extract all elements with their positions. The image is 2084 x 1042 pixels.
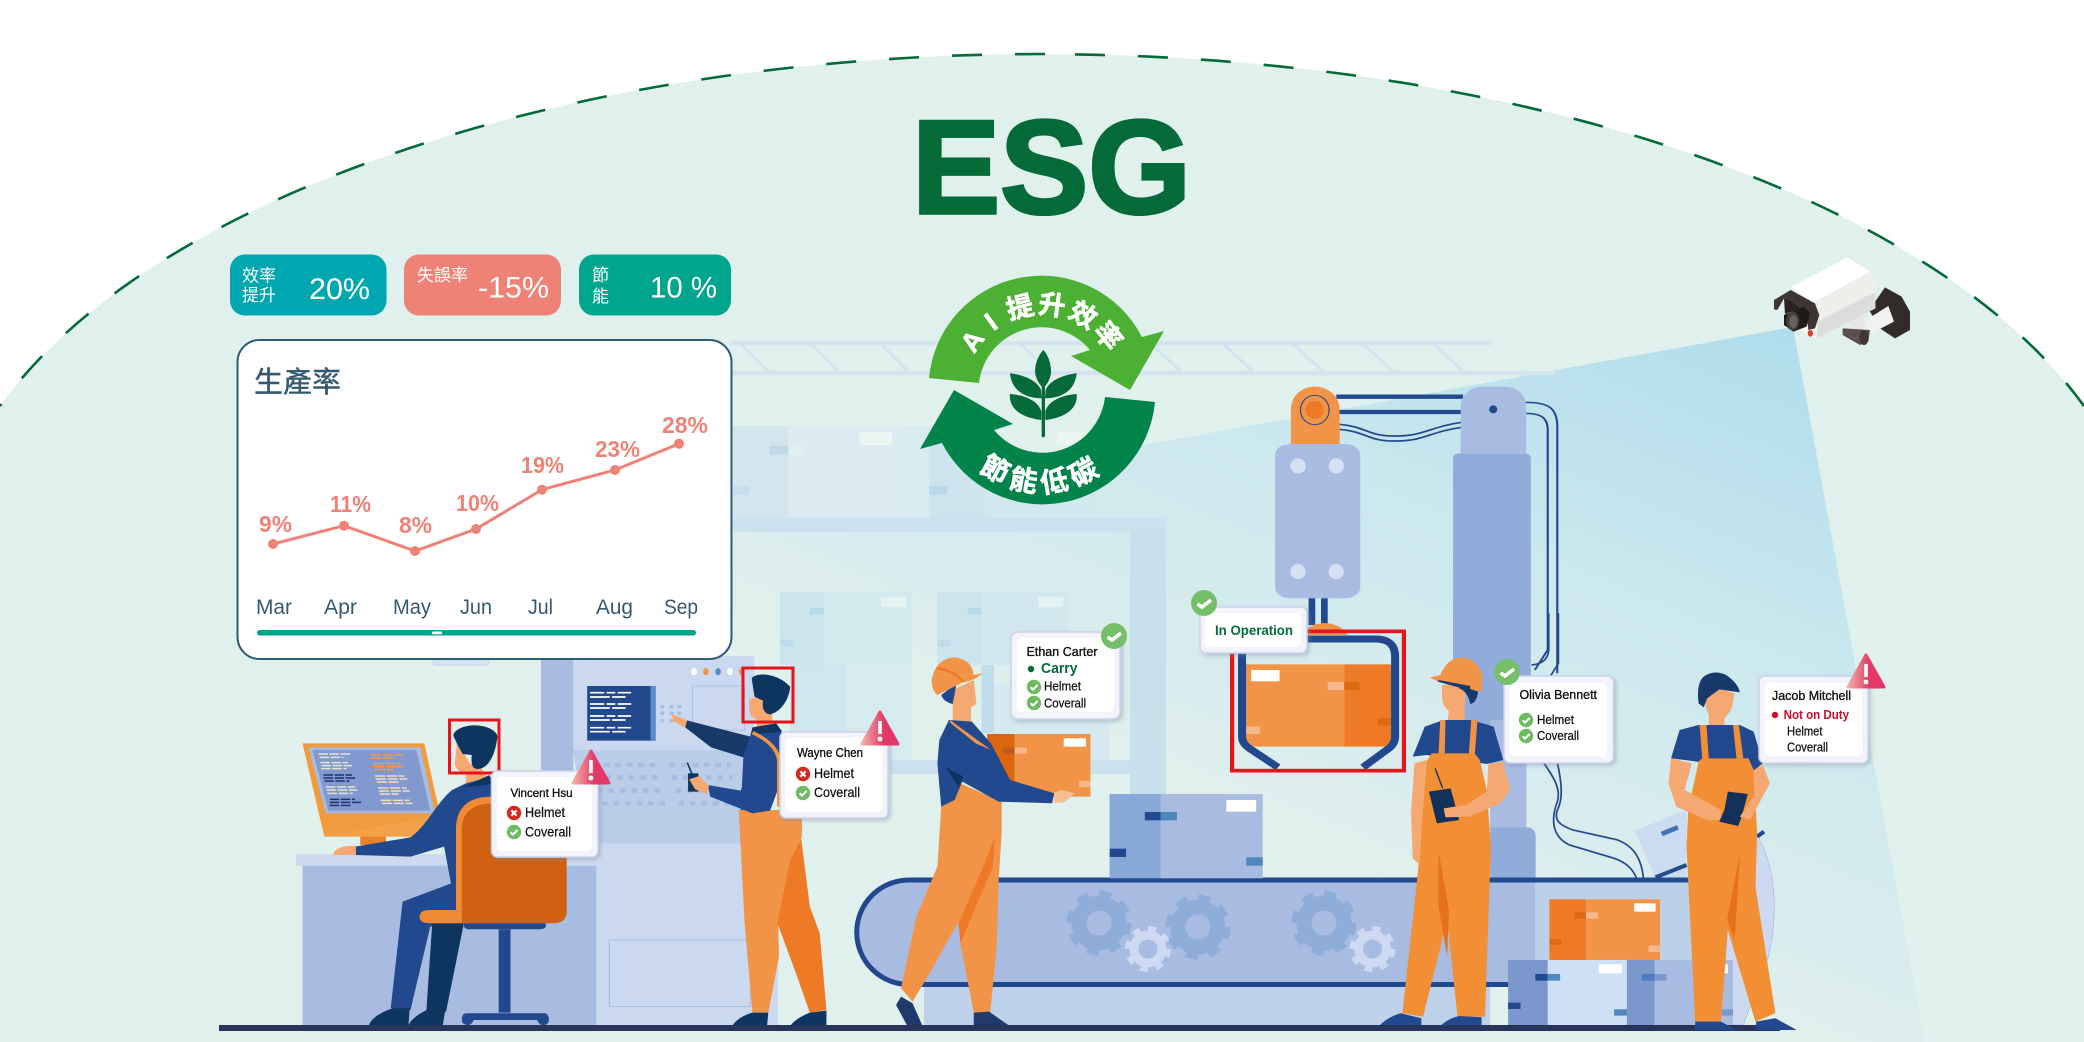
line chart: 11%: [330, 491, 371, 517]
worker: Wayne Chen standing: [671, 675, 826, 1025]
box on conveyor: [1110, 794, 1263, 878]
badge: efficiency up: 提升: [242, 286, 276, 305]
worker: Olivia Bennett with device: [1380, 657, 1510, 1025]
icon: ok badge: [1494, 659, 1520, 685]
office desk: [296, 854, 596, 1025]
line chart: 10%: [456, 490, 499, 516]
red detection box: gripper: [1232, 631, 1404, 771]
line chart: 19%: [521, 452, 564, 478]
office chair: [420, 797, 567, 1025]
machine screen: [587, 686, 656, 741]
camera view cone: [0, 327, 1925, 1042]
icon: warning triangle: [1848, 655, 1884, 687]
callout: Jacob Mitchell: Helmet: [1787, 724, 1823, 739]
carried box: [987, 734, 1090, 797]
worker: Jacob Mitchell with device: [1669, 673, 1797, 1030]
machine button rows: [592, 765, 735, 803]
callout: Ethan Carter: [1011, 623, 1127, 719]
callout: Ethan Carter: Ethan Carter: [1026, 644, 1098, 659]
robot gripper holding box: [1232, 623, 1404, 771]
badge: energy saving: 能: [592, 287, 609, 306]
callout: Jacob Mitchell: [1759, 655, 1884, 763]
machine top tab: [433, 660, 489, 665]
robot column: [1453, 453, 1643, 879]
callout: Vincent Hsu: Helmet: [525, 804, 565, 820]
callout: Olivia Bennett: [1494, 659, 1614, 763]
badge: error rate: 失誤率: [417, 266, 468, 285]
badge: error rate: [404, 254, 561, 316]
badge: energy saving: 節: [592, 266, 609, 285]
badge: efficiency up: 20%: [309, 273, 370, 306]
icon: plant: [1010, 350, 1077, 437]
callout: Vincent Hsu: [492, 751, 609, 857]
icon: warning triangle: [862, 712, 898, 744]
machine indicator lights: [691, 668, 745, 675]
callout: Jacob Mitchell: Not on Duty: [1784, 707, 1850, 722]
month axis labels: Mar: [256, 596, 292, 619]
factory background: faded boxes and frame: [733, 426, 1166, 800]
text: 節能低碳: 節能低碳: [980, 452, 1100, 496]
icon: ok badge: [1191, 590, 1217, 616]
arrow: energy saving: [920, 390, 1155, 504]
callout: Ethan Carter: Coverall: [1044, 695, 1086, 710]
icon: ok badge: [1101, 623, 1127, 649]
line chart: 28%: [662, 412, 708, 438]
month axis labels: May: [393, 596, 431, 619]
panel: productivity chart: [238, 340, 732, 659]
red detection box: Vincent: [450, 720, 499, 773]
callout: Ethan Carter: Carry: [1041, 660, 1078, 677]
control machine: [541, 656, 778, 1025]
callout: Wayne Chen: Wayne Chen: [797, 745, 863, 760]
callout: Olivia Bennett: Coverall: [1537, 728, 1579, 743]
robot cables: [1336, 397, 1557, 673]
callout: Jacob Mitchell: Jacob Mitchell: [1772, 688, 1851, 703]
logo: AI efficiency / energy saving cycle: [920, 276, 1164, 504]
callout: Wayne Chen: [780, 712, 898, 818]
callout: In Operation: In Operation: [1215, 623, 1293, 638]
conveyor gears: [1070, 894, 1393, 970]
stacked boxes: [1508, 899, 1733, 1025]
panel title: 生產率: [254, 366, 341, 399]
badge: energy saving: 10 %: [650, 272, 717, 304]
floor line: [219, 1025, 1780, 1031]
line chart: 9%: [259, 511, 292, 537]
callout: In Operation: [1191, 590, 1307, 653]
line chart: 8%: [399, 512, 432, 538]
arrow: AI efficiency: [929, 276, 1164, 390]
month axis labels: [256, 596, 698, 619]
callout: Wayne Chen: Helmet: [814, 765, 854, 781]
badge: efficiency up: [230, 254, 386, 316]
dashed dome outline: [0, 54, 2084, 406]
factory background: roof rails: [731, 343, 1555, 373]
month axis labels: Apr: [324, 596, 357, 619]
callout: Vincent Hsu: Coverall: [525, 824, 571, 840]
title: ESG: ESG: [912, 94, 1191, 242]
callout: Jacob Mitchell: Coverall: [1787, 740, 1828, 754]
worker: Ethan Carter carrying box: [896, 657, 1090, 1025]
text: AI 提升效率: A I 提升效率: [963, 292, 1125, 354]
callout: Olivia Bennett: Helmet: [1537, 712, 1574, 727]
conveyor belt: [854, 810, 1774, 1025]
scroll bar: [257, 630, 696, 636]
callout: Olivia Bennett: Olivia Bennett: [1520, 687, 1597, 702]
badge: energy saving: [579, 254, 731, 316]
line chart: [259, 412, 708, 556]
callout: Ethan Carter: Helmet: [1044, 679, 1081, 694]
robot arm: [1275, 387, 1557, 673]
icon: warning triangle: [573, 751, 609, 783]
security camera: [1774, 257, 1910, 345]
worker: Vincent Hsu seated: [333, 725, 567, 1025]
badge: efficiency up: 效率: [242, 266, 276, 286]
month axis labels: Jul: [528, 596, 553, 619]
callout: Wayne Chen: Coverall: [814, 784, 860, 800]
callout: Vincent Hsu: Vincent Hsu: [510, 786, 572, 800]
line chart: 23%: [595, 436, 640, 462]
month axis labels: Jun: [460, 596, 492, 619]
computer monitor: [303, 743, 440, 845]
month axis labels: Aug: [596, 596, 633, 619]
badge: error rate: -15%: [478, 272, 549, 304]
red detection box: Wayne: [743, 668, 793, 722]
month axis labels: Sep: [664, 596, 698, 619]
